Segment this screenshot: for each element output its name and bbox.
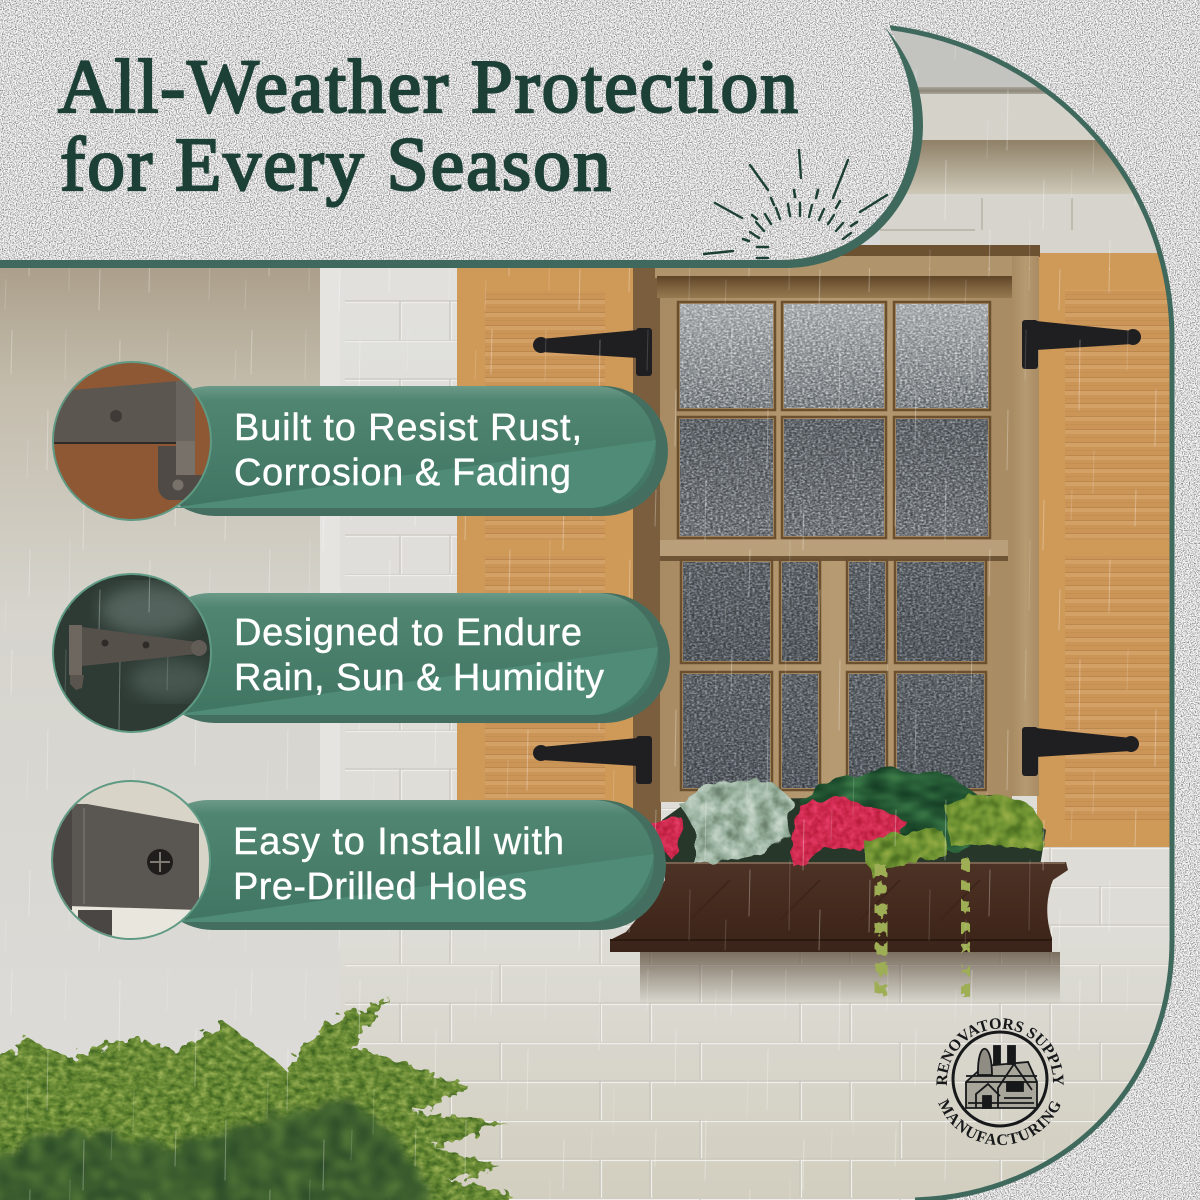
upper sash panes bbox=[680, 304, 988, 536]
sunburst icon bbox=[704, 150, 887, 258]
flowers in planter bbox=[652, 768, 1046, 1003]
trailing vine left bbox=[878, 864, 884, 994]
logo: Renovators Supply Manufacturing: RENOVATORS SUPPLY bbox=[936, 1018, 1064, 1086]
fern fronds light layer bbox=[0, 998, 510, 1200]
hinge: bottom right bbox=[1022, 727, 1139, 776]
hinge: top right bbox=[1022, 320, 1141, 369]
upper sash muntin outlines bbox=[678, 302, 990, 538]
feature text: Easy to Install with bbox=[233, 821, 564, 863]
circle photo: rusted surface with hinge bbox=[50, 360, 215, 525]
lime leaves bbox=[862, 828, 950, 876]
right window shutter bbox=[1037, 253, 1175, 847]
planter box bbox=[610, 862, 1068, 952]
feature pill: easy install bbox=[148, 800, 666, 930]
thin green frame curve bbox=[885, 27, 1172, 1200]
rain over top siding bbox=[880, 30, 1175, 270]
lower sash muntin outlines bbox=[681, 560, 986, 790]
flower foliage backing bbox=[655, 795, 1046, 866]
fern bush bbox=[0, 998, 510, 1200]
logo: Renovators Supply Manufacturing bbox=[936, 1018, 1064, 1146]
shadow under planter bbox=[640, 952, 1060, 1004]
silver foliage bbox=[680, 780, 792, 864]
trailing vine right bbox=[963, 860, 968, 1003]
fern lower dark layer bbox=[0, 1100, 440, 1200]
left window shutter bbox=[457, 268, 633, 846]
feature pill: weather endurance bbox=[150, 593, 670, 723]
title: for Every Season bbox=[60, 123, 611, 207]
feature pill: rust resistance bbox=[150, 386, 668, 516]
rain overlay bbox=[0, 268, 1175, 1200]
feature text: Designed to Endure bbox=[234, 612, 582, 654]
feature text: Pre-Drilled Holes bbox=[233, 866, 527, 908]
circle photo: pre-drilled hinge with screw bbox=[50, 778, 215, 945]
window bbox=[633, 245, 1040, 838]
feature text: Built to Resist Rust, bbox=[234, 407, 582, 449]
circle photo: rainy scene with hinge bbox=[50, 570, 215, 735]
granite outer border, right side bbox=[885, 0, 1200, 1200]
title: All-Weather Protection bbox=[58, 45, 798, 129]
title bbox=[58, 45, 798, 207]
feature text: Corrosion & Fading bbox=[234, 452, 571, 494]
heading panel bbox=[0, 0, 913, 260]
small pink flowers bbox=[652, 816, 682, 860]
red-pink flowers bbox=[788, 796, 905, 868]
logo: Renovators Supply Manufacturing: MANUFACTURING bbox=[938, 1098, 1060, 1146]
hinge: top left bbox=[533, 328, 652, 376]
heading band bbox=[0, 27, 923, 268]
lower sash panes bbox=[683, 562, 984, 788]
logo house bbox=[966, 1046, 1037, 1108]
feature text: Rain, Sun & Humidity bbox=[234, 657, 604, 699]
hinge: bottom left bbox=[533, 736, 652, 784]
lime foliage bbox=[945, 790, 1046, 850]
dark green leaves bbox=[800, 768, 985, 855]
